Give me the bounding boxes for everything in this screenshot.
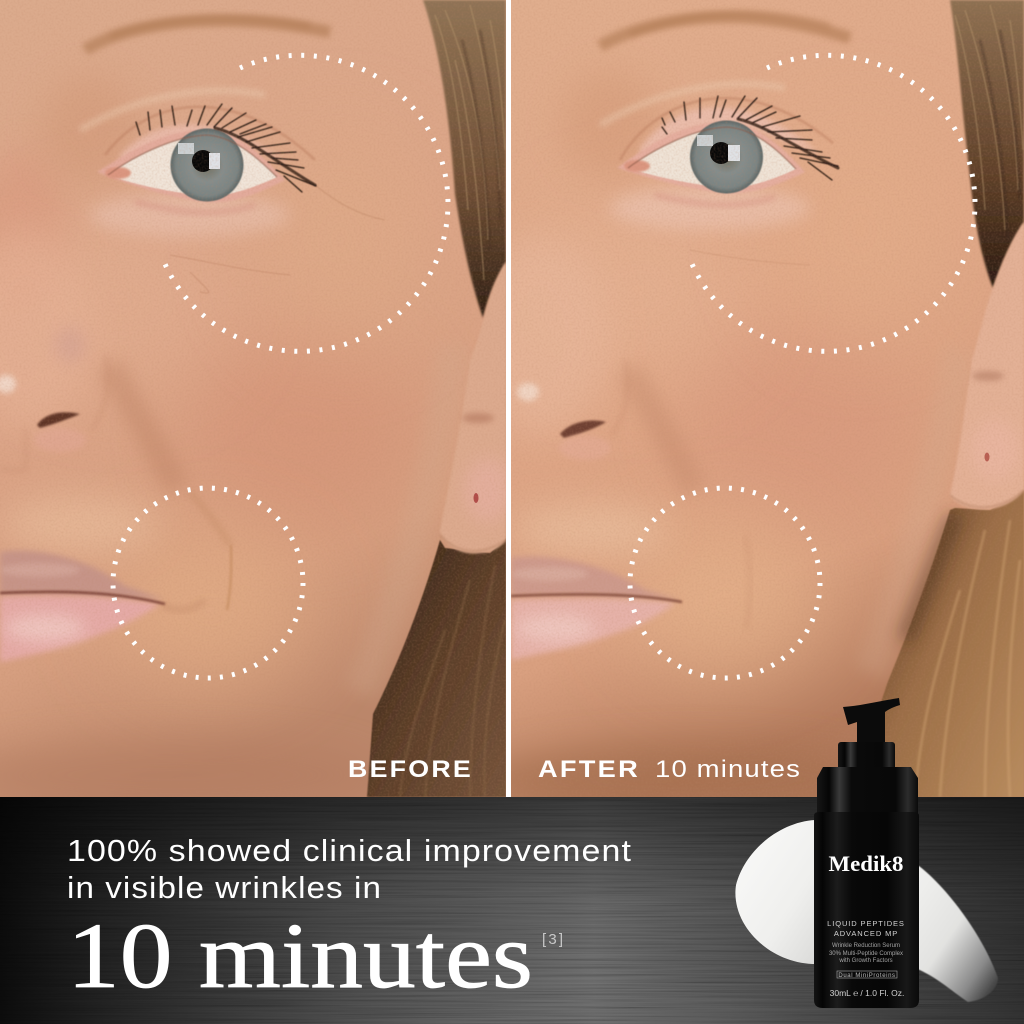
panel: before photo bbox=[0, 0, 512, 811]
after: lips bbox=[511, 557, 682, 660]
before: eyelashes bbox=[136, 104, 316, 192]
before: hair lower bbox=[367, 538, 506, 797]
after: facial skin bbox=[480, 0, 1024, 816]
bottle label text bbox=[827, 851, 905, 998]
after: brow bbox=[600, 14, 850, 46]
bottle label text: Dual MiniProteins bbox=[838, 973, 896, 979]
footnote reference: [3] bbox=[542, 931, 563, 948]
before: skin grain bbox=[0, 0, 506, 797]
before: ear bbox=[440, 262, 512, 553]
bottle label text: Wrinkle Reduction Serum bbox=[832, 943, 900, 949]
pump nozzle bbox=[843, 698, 900, 745]
collar bbox=[838, 742, 895, 774]
bottle label text: ADVANCED MP bbox=[834, 929, 898, 938]
before: lips bbox=[0, 551, 165, 662]
headline text: 100% showed clinical improvement bbox=[67, 833, 632, 868]
after: skin grain bbox=[512, 14, 1024, 653]
bottle label text: LIQUID PEPTIDES bbox=[827, 919, 905, 928]
before: smile line bbox=[162, 492, 231, 610]
dotted circle: after mouth area bbox=[630, 488, 820, 678]
after: ear bbox=[950, 222, 1024, 509]
bottle label text: with Growth Factors bbox=[838, 958, 893, 964]
dotted circle: before mouth area bbox=[113, 488, 303, 678]
before: brow bbox=[85, 18, 330, 50]
after: eyelashes bbox=[662, 96, 838, 180]
after: eye bbox=[617, 96, 838, 205]
after: hair lower bbox=[875, 490, 1024, 797]
label: after 10 minutes: 10 minutes bbox=[655, 756, 801, 783]
after: smile line bbox=[745, 535, 750, 630]
dotted circle: after eye area bbox=[692, 55, 975, 351]
before: nose bbox=[0, 230, 178, 488]
dotted circle: before eye area bbox=[165, 55, 448, 351]
headline text: in visible wrinkles in bbox=[67, 870, 382, 905]
product: cream swatch bbox=[735, 820, 998, 1002]
before: hair upper bbox=[423, 0, 506, 318]
before: eye socket shading and creases bbox=[40, 75, 385, 293]
label: after 10 minutes: AFTER bbox=[538, 756, 640, 783]
panel: brushed metal band bbox=[0, 797, 1024, 1024]
before: facial skin bbox=[0, 0, 506, 811]
big stat: 10 minutes: 10 minutes bbox=[67, 905, 533, 1008]
shoulder cap bbox=[817, 767, 918, 815]
label: after 10 minutes bbox=[538, 756, 801, 783]
bottle label text: 30% Multi-Peptide Complex bbox=[829, 951, 903, 957]
after: nose bbox=[511, 249, 696, 486]
bottle label text: 30mL ℮ / 1.0 Fl. Oz. bbox=[830, 988, 904, 998]
body bbox=[814, 812, 919, 1008]
panel: after photo bbox=[470, 0, 1024, 816]
label: before: BEFORE bbox=[348, 756, 473, 783]
after: hair upper bbox=[950, 0, 1024, 288]
product: bottle bbox=[814, 698, 919, 1008]
after: eye socket shading and creases bbox=[573, 80, 834, 254]
bottle label text: Medik8 bbox=[828, 851, 904, 876]
headline text bbox=[67, 833, 632, 905]
before: eye bbox=[97, 104, 316, 212]
